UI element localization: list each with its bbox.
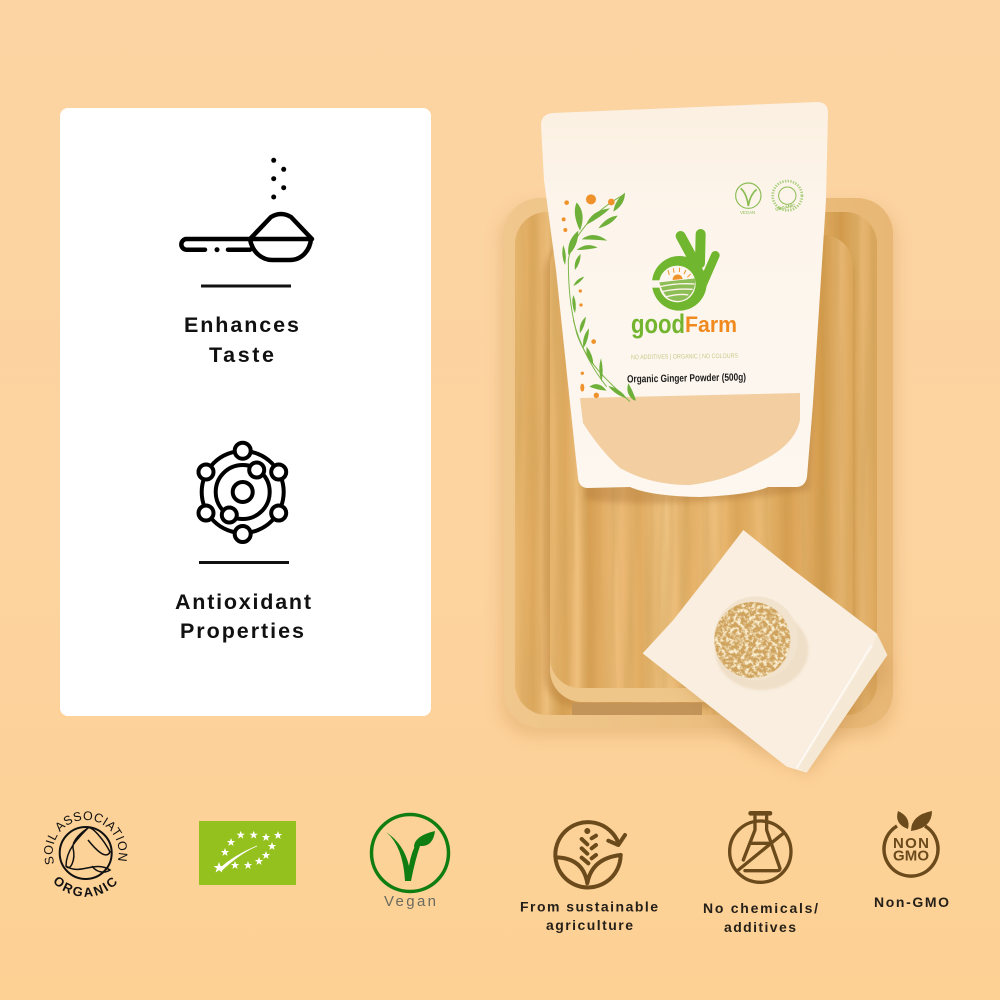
heading: antioxidant properties: Antioxidant <box>175 590 311 614</box>
text: goodfarm wordmark: good <box>631 309 685 339</box>
label: non-gmo: Non-GMO <box>874 894 949 910</box>
heading: enhances taste <box>184 313 299 367</box>
heading: antioxidant properties <box>175 590 311 643</box>
label: from sustainable agriculture: From sustainable <box>520 898 658 914</box>
panel: benefits card <box>60 108 431 716</box>
icon: non-gmo <box>884 811 938 876</box>
label: from sustainable agriculture: agriculture <box>546 917 633 933</box>
heading: antioxidant properties: Properties <box>180 619 304 643</box>
label: no chemicals additives: additives <box>724 919 796 935</box>
divider: antioxidant <box>199 561 289 564</box>
photo: product pouch <box>541 102 828 503</box>
label: from sustainable agriculture <box>520 898 658 933</box>
text: goodfarm wordmark: Farm <box>685 312 737 337</box>
label: no chemicals additives <box>703 900 818 935</box>
text: product name: Organic Ginger Powder (500g) <box>627 371 746 386</box>
divider: taste <box>201 284 291 288</box>
icon: non-gmo: NON <box>893 835 929 852</box>
icon: pouch vegan badge: VEGAN <box>740 210 755 215</box>
icon: no chemicals <box>730 813 791 882</box>
icon: pouch soil association badge: ORGANIC <box>775 203 796 212</box>
logo: goodfarm hand <box>648 234 715 311</box>
icon: non-gmo: GMO <box>893 848 929 864</box>
icon: atom <box>198 443 286 542</box>
icon: vegan <box>372 814 448 910</box>
photo: muslin cloth with ginger powder <box>643 530 890 775</box>
icon: vegan: Vegan <box>384 893 436 910</box>
heading: enhances taste: Taste <box>209 343 274 367</box>
icon: pouch soil association badge <box>773 181 802 212</box>
icon: soil association organic: ORGANIC <box>54 877 116 897</box>
label: no chemicals additives: No chemicals/ <box>703 900 818 916</box>
text: goodfarm wordmark <box>631 309 737 339</box>
icon: soil association organic <box>44 811 128 897</box>
photo: bamboo tray <box>500 198 896 737</box>
icon: pouch vegan badge <box>736 183 761 215</box>
icon: soil association organic: SOIL ASSOCIATION <box>44 811 128 864</box>
text: pouch claims: NO ADDITIVES | ORGANIC | NO COLOURS <box>631 353 739 361</box>
heading: enhances taste: Enhances <box>184 313 299 337</box>
icon: eu organic leaf <box>199 821 296 885</box>
icon: sustainable agriculture <box>555 822 625 887</box>
icon: vine decoration <box>562 193 636 402</box>
icon: spoon with powder <box>181 158 312 260</box>
powder window <box>580 393 800 485</box>
